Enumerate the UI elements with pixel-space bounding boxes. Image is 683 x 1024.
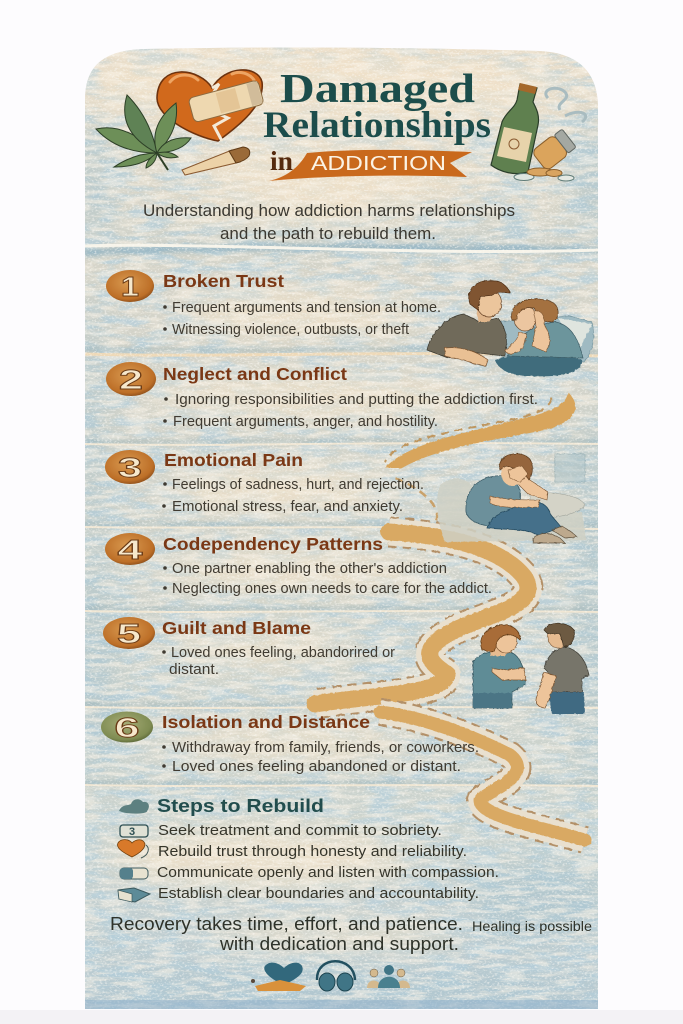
- icon: heart on hands: [251, 963, 306, 991]
- winding recovery path: [315, 392, 585, 840]
- closing message: [110, 914, 592, 954]
- badge 3: [105, 450, 155, 484]
- section 5: Guilt and Blame: Guilt and Blame: [162, 618, 311, 638]
- badge 2: [106, 362, 156, 396]
- step 1: 3: [129, 826, 135, 838]
- step 2: [118, 840, 467, 860]
- section 6: Isolation and Distance: [101, 712, 479, 775]
- badge 5: 5: [117, 618, 141, 649]
- step 2: Rebuild trust through honesty and reliability.: [158, 844, 467, 860]
- subtitle: Understanding how addiction harms relationships: [143, 202, 515, 220]
- title: [263, 65, 491, 181]
- illustration: arguing couple: [473, 623, 589, 714]
- step 3: Communicate openly and listen with compassion.: [157, 865, 499, 881]
- section 4: Codependency Patterns: [105, 533, 492, 597]
- icon: group of people: [367, 965, 410, 988]
- section 4: Codependency Patterns: One partner enabling the other's addiction: [172, 561, 447, 577]
- subtitle: and the path to rebuild them.: [220, 225, 436, 243]
- title: Damaged: [280, 65, 475, 111]
- icon: bottle, pills and smoke: [491, 83, 586, 181]
- title: Relationships: [263, 105, 491, 146]
- section 3: Emotional Pain: Emotional Pain: [164, 450, 303, 470]
- section 6: Isolation and Distance: Loved ones feeling abandoned or distant.: [172, 759, 461, 775]
- icon: cannabis leaf: [96, 95, 191, 170]
- badge 4: 4: [118, 534, 143, 565]
- section 5: Guilt and Blame: Loved ones feeling, abandorired or: [171, 645, 395, 661]
- header illustration: broken heart with bandage: [157, 70, 264, 141]
- step 1: Seek treatment and commit to sobriety.: [158, 823, 442, 839]
- addiction banner: ADDICTION: [311, 153, 446, 175]
- closing message: Recovery takes time, effort, and patience.: [110, 914, 463, 934]
- section 4: Codependency Patterns: Codependency Patterns: [163, 534, 383, 554]
- icon: joint: [182, 147, 250, 175]
- closing message: Healing is possible: [472, 919, 592, 934]
- section 6: Isolation and Distance: Isolation and Distance: [162, 712, 370, 732]
- section 2: Neglect and Conflict: [106, 362, 538, 430]
- section 1: Broken Trust: [106, 270, 441, 338]
- title: in: [270, 146, 293, 176]
- section 4: Codependency Patterns: Neglecting ones own needs to care for the addict.: [172, 581, 492, 597]
- section 3: Emotional Pain: [105, 450, 424, 515]
- illustration: couple on sofa: [427, 280, 594, 376]
- panel: Steps to Rebuild: Steps to Rebuild: [157, 796, 324, 816]
- section 1: Broken Trust: Witnessing violence, outbusts, or theft: [172, 322, 409, 338]
- section 5: Guilt and Blame: distant.: [169, 662, 219, 678]
- panel: Steps to Rebuild: [118, 796, 499, 902]
- badge 3: 3: [118, 452, 142, 483]
- badge 1: [106, 270, 154, 302]
- badge 6: 6: [114, 712, 140, 743]
- illustration: person sitting with head in hands: [437, 454, 586, 543]
- icon: cloud: [119, 799, 149, 814]
- badge 6: [101, 712, 153, 743]
- section 6: Isolation and Distance: Withdraway from family, friends, or coworkers.: [172, 740, 479, 756]
- footer icons: [251, 961, 410, 991]
- panel: textured card background: [70, 47, 617, 1010]
- addiction banner: [269, 150, 472, 181]
- section 1: Broken Trust: Frequent arguments and tension at home.: [172, 300, 441, 316]
- section 3: Emotional Pain: Feelings of sadness, hurt, and rejection.: [172, 477, 424, 493]
- closing message: with dedication and support.: [219, 934, 459, 954]
- section 2: Neglect and Conflict: Frequent arguments, anger, and hostility.: [173, 414, 438, 430]
- badge 4: [105, 533, 155, 565]
- badge 2: 2: [119, 364, 143, 395]
- subtitle: [143, 202, 515, 243]
- step 4: Establish clear boundaries and accountability.: [158, 886, 479, 902]
- badge 1: 1: [121, 271, 139, 302]
- badge 5: [103, 617, 155, 649]
- section 3: Emotional Pain: Emotional stress, fear, and anxiety.: [172, 499, 403, 515]
- icon: headphones: [317, 961, 355, 991]
- section 1: Broken Trust: Broken Trust: [163, 271, 284, 291]
- section 5: Guilt and Blame: [103, 617, 395, 678]
- section 2: Neglect and Conflict: Neglect and Conflict: [163, 364, 347, 384]
- section 2: Neglect and Conflict: Ignoring responsibilities and putting the addiction first.: [175, 392, 538, 408]
